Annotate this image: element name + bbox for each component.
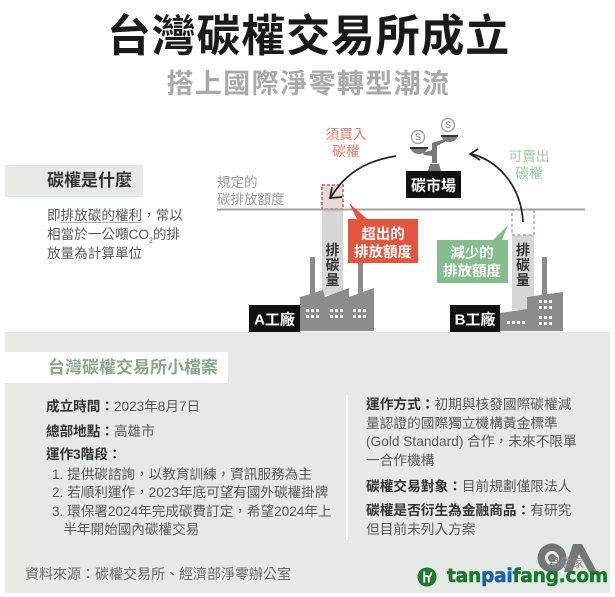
- callout: reduced allowance: [437, 225, 508, 283]
- panel heading: [5, 352, 228, 383]
- heading: what is a carbon credit: [5, 165, 143, 197]
- chimney B emissions: 量: [516, 272, 530, 288]
- chimney A emissions: [322, 185, 343, 295]
- stage list: 半年開始國內碳權交易: [63, 522, 199, 537]
- logo: CNA: [538, 544, 596, 572]
- financial product: [366, 503, 571, 537]
- market label: [406, 171, 461, 198]
- operation mode: (Gold Standard) 合作，未來不限單: [366, 434, 577, 449]
- icon: scale: [410, 118, 458, 171]
- factory B label: [450, 305, 500, 332]
- callout: reduced allowance: 排放額度: [443, 262, 501, 280]
- callout: reduced allowance: 減少的: [450, 244, 494, 262]
- panel: fact sheet: [5, 332, 610, 593]
- stage list: 1. 提供碳諮詢，以教育訓練，資訊服務為主: [52, 467, 312, 482]
- financial product: 但目前未列入方案: [366, 522, 476, 537]
- market label: 碳市場: [411, 176, 456, 194]
- column divider: [346, 395, 348, 540]
- subtitle: 搭上國際淨零轉型潮流: [166, 69, 450, 99]
- stage list: [52, 467, 332, 537]
- factory B: [500, 257, 563, 331]
- panel heading: 台灣碳權交易所小檔案: [48, 358, 218, 377]
- arrow: factory B to market: [470, 149, 523, 222]
- text block: definition: 放量為計算單位: [47, 246, 142, 261]
- title: 台灣碳權交易所成立: [107, 12, 510, 61]
- factory A label: A工廠: [254, 310, 295, 328]
- limit label: [217, 175, 284, 207]
- stage list: 2. 若順利運作，2023年底可望有國外碳權掛牌: [52, 485, 328, 500]
- operation mode: 一合作機構: [366, 453, 434, 468]
- label: must buy credits: 須買入: [325, 127, 367, 142]
- factory B label: B工廠: [455, 310, 495, 328]
- chimney A emissions: 碳: [326, 257, 340, 273]
- watermark logo: [417, 568, 436, 586]
- callout: exceeded allowance: 超出的: [361, 225, 405, 243]
- operation mode: [366, 397, 577, 468]
- financial product: 碳權是否衍生為金融商品：有研究: [366, 503, 571, 518]
- three stages: 運作3階段：: [46, 447, 122, 462]
- factory A: [300, 257, 374, 331]
- icon: scale: S: [415, 132, 421, 142]
- limit line: [217, 208, 585, 210]
- trading parties: 碳權交易對象：目前規劃僅限法人: [366, 478, 571, 494]
- chimney B emissions: [512, 210, 534, 310]
- limit label: 規定的: [217, 175, 258, 190]
- callout: exceeded allowance: 排放額度: [354, 243, 412, 261]
- founding date: 成立時間：2023年8月7日: [46, 399, 200, 414]
- factory A label: [249, 305, 300, 332]
- chimney B emissions: 排: [516, 242, 530, 258]
- arrow: market to factory A: [330, 156, 396, 198]
- chimney B emissions: 碳: [516, 257, 530, 273]
- label: must buy credits: 碳權: [332, 144, 360, 159]
- stage list: 3. 環保署2024年完成碳費訂定，希望2024年上: [52, 504, 332, 519]
- chimney A emissions: 排: [326, 242, 340, 258]
- label: can sell credits: 可賣出: [508, 149, 550, 164]
- label: can sell credits: 碳權: [515, 166, 543, 181]
- right column: [366, 397, 577, 537]
- icon: scale: S: [445, 120, 451, 130]
- heading: what is a carbon credit: 碳權是什麼: [47, 171, 132, 190]
- text block: definition: [47, 208, 183, 261]
- label: can sell credits: [508, 149, 550, 181]
- text block: definition: 即排放碳的權利，常以: [47, 208, 183, 223]
- source: 資料來源：碳權交易所、經濟部淨零辦公室: [25, 566, 291, 582]
- text block: definition: 相當於一公噸CO2的排: [47, 227, 180, 245]
- left column: [46, 399, 332, 537]
- watermark: account name: 易碳家: [548, 556, 584, 570]
- operation mode: 量認證的國際獨立機構黃金標準: [366, 416, 558, 431]
- chimney A emissions: 量: [326, 272, 340, 288]
- operation mode: 運作方式：初期與核發國際碳權減: [366, 397, 571, 412]
- headquarters: 總部地點：高雄市: [46, 424, 155, 439]
- label: must buy credits: [325, 127, 367, 159]
- watermark text: tanpaifang.com: [447, 566, 608, 587]
- limit label: 碳排放額度: [217, 192, 284, 207]
- callout: exceeded allowance: [348, 203, 418, 263]
